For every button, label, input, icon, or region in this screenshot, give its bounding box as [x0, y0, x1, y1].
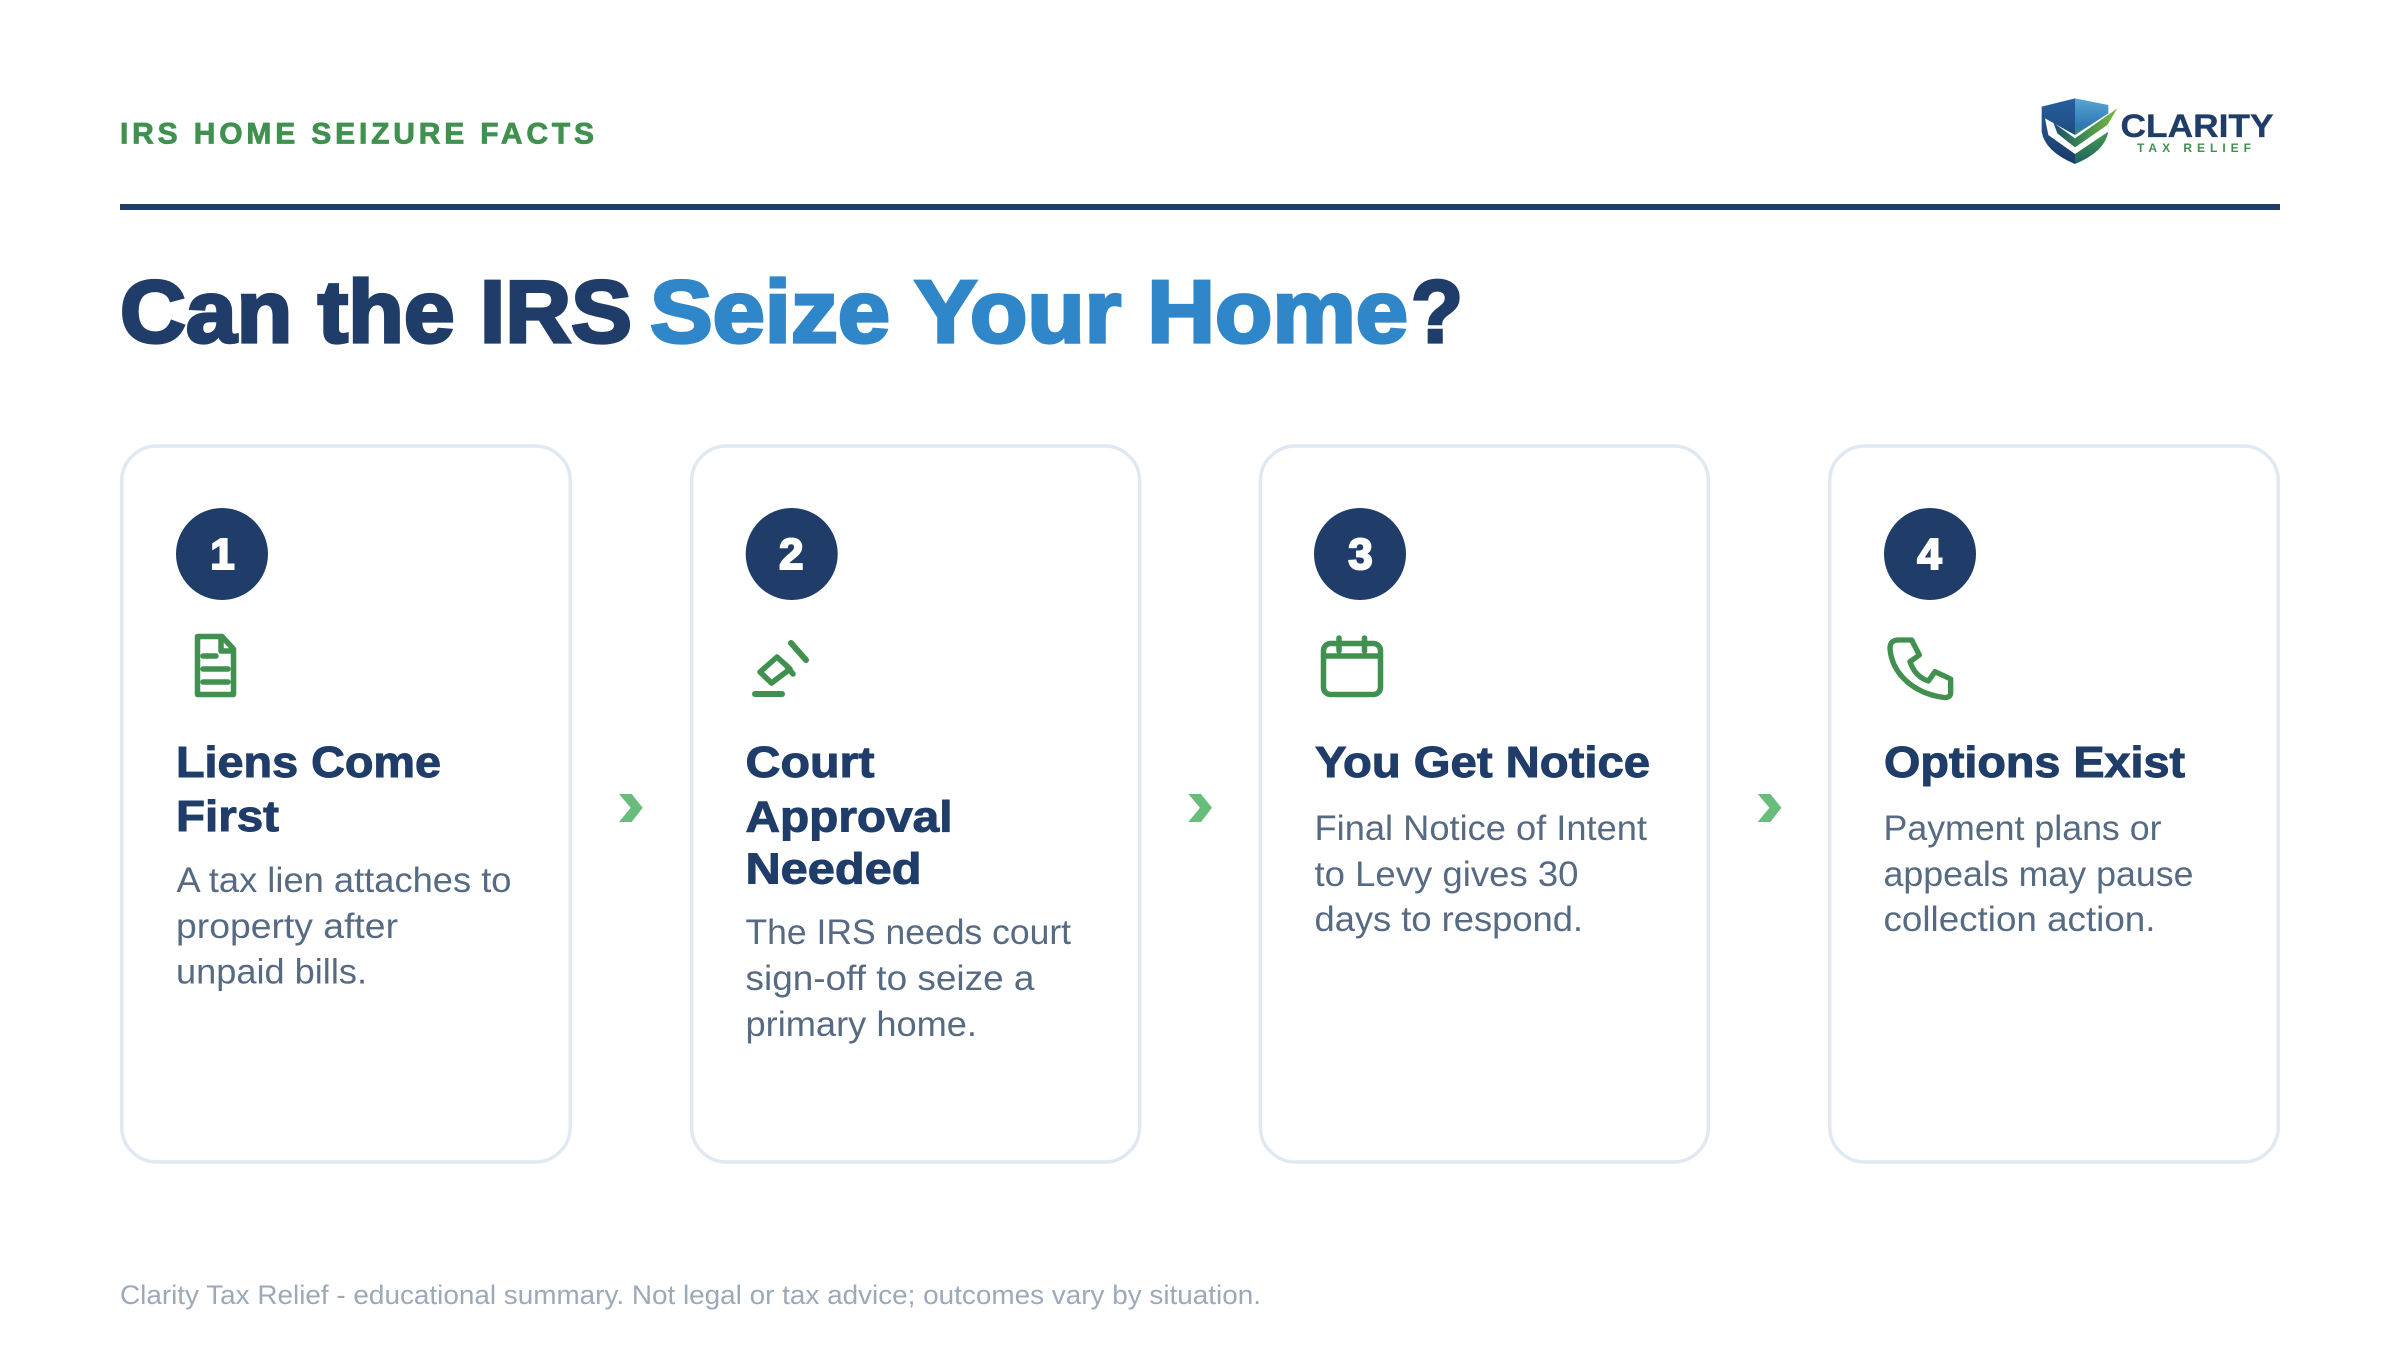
icon: shield with checkmark [2042, 98, 2117, 164]
heading [176, 738, 441, 841]
title: ? [1411, 262, 1463, 361]
description: property after [176, 907, 398, 946]
description: appeals may pause [1884, 855, 2194, 894]
step number 4: 4 [1917, 530, 1942, 579]
heading: Needed [746, 844, 922, 894]
title: Can the IRS [120, 262, 632, 361]
eyebrow label: IRS HOME SEIZURE FACTS [120, 118, 594, 150]
step number 2 [746, 508, 838, 600]
logo: Clarity Tax Relief [2042, 98, 2274, 164]
panel: step 4 Options Exist [1830, 446, 2278, 1162]
step number 3 [1314, 508, 1406, 600]
description: The IRS needs court [746, 913, 1071, 952]
step number 2: 2 [779, 530, 803, 579]
title: Seize Your Home [650, 262, 1408, 361]
step number 4 [1884, 508, 1976, 600]
description: Payment plans or [1884, 809, 2162, 848]
description [1314, 809, 1647, 939]
description: unpaid bills. [176, 952, 367, 992]
description: Final Notice of Intent [1314, 809, 1647, 848]
description [176, 861, 512, 992]
description [1884, 809, 2194, 939]
logo tagline: TAX RELIEF [2137, 141, 2251, 155]
heading: Options Exist [1884, 738, 2185, 787]
description: days to respond. [1314, 900, 1583, 939]
arrow 1 [619, 794, 643, 822]
panel: step 2 Court Approval Needed [692, 446, 1140, 1162]
arrow 3 [1758, 794, 1781, 822]
step number 3: 3 [1348, 530, 1373, 579]
arrow 2 [1188, 794, 1212, 822]
panel: step 3 You Get Notice [1260, 446, 1708, 1162]
logo wordmark: CLARITY [2120, 108, 2274, 144]
icon: document [198, 636, 234, 694]
step number 1: 1 [210, 530, 235, 579]
heading [746, 738, 952, 894]
heading: Liens Come [176, 738, 441, 787]
footer disclaimer: Clarity Tax Relief - educational summary. Not legal or tax advice; outcomes vary by situation. [120, 1280, 1261, 1310]
description: collection action. [1884, 900, 2156, 939]
description: A tax lien attaches to [176, 861, 512, 900]
heading: Court [746, 738, 875, 787]
description: primary home. [746, 1005, 977, 1044]
icon: phone [1890, 640, 1951, 697]
heading: First [176, 792, 279, 841]
heading: You Get Notice [1315, 738, 1650, 787]
description: to Levy gives 30 [1314, 855, 1578, 894]
panel: step 1 Liens Come First [122, 446, 570, 1162]
title [120, 262, 1463, 361]
heading: Approval [746, 792, 952, 842]
step number 1 [176, 508, 268, 600]
description [746, 913, 1071, 1044]
icon: calendar [1324, 638, 1380, 694]
icon: gavel [755, 643, 806, 694]
description: sign-off to seize a [746, 959, 1035, 998]
